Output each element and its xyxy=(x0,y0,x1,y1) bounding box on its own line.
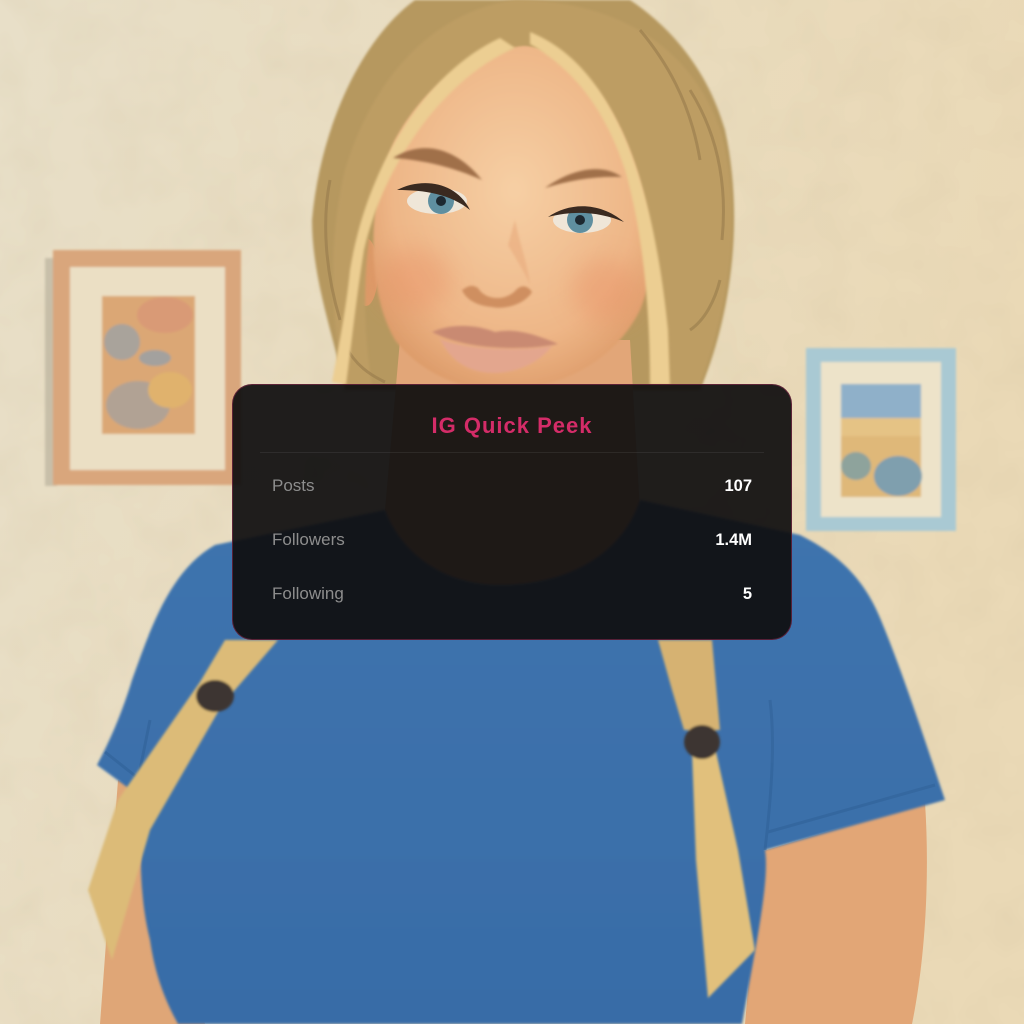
left braid xyxy=(88,640,278,960)
card title: IG Quick Peek xyxy=(432,413,592,438)
row: following xyxy=(272,584,752,603)
nose xyxy=(462,220,532,308)
framed picture: left xyxy=(45,250,241,486)
eyebrows xyxy=(393,148,622,188)
t-shirt xyxy=(97,500,945,1024)
blond strand: left xyxy=(332,38,515,385)
mouth xyxy=(432,326,558,373)
side braid texture xyxy=(326,30,723,382)
row: followers xyxy=(272,530,752,549)
row: posts: 107 xyxy=(724,477,752,495)
face xyxy=(373,45,655,390)
row: posts: Posts xyxy=(272,476,315,495)
hair back xyxy=(312,0,734,390)
row: following: 5 xyxy=(743,585,752,603)
cheek blush xyxy=(379,248,639,322)
right braid xyxy=(658,640,755,998)
row: posts xyxy=(272,476,752,495)
ears xyxy=(354,224,696,320)
row: following: Following xyxy=(272,584,344,603)
eyes xyxy=(397,183,624,233)
row: followers: Followers xyxy=(272,530,345,549)
blond strand: right xyxy=(530,32,670,385)
arm: left xyxy=(100,780,205,1024)
sleeve seams xyxy=(105,700,935,850)
framed picture: right xyxy=(806,348,956,531)
row: followers: 1.4M xyxy=(715,531,752,549)
stats card xyxy=(232,384,792,640)
hair top and side sweeps xyxy=(333,0,732,385)
arm: right xyxy=(745,802,927,1024)
neck and chest xyxy=(385,340,640,585)
